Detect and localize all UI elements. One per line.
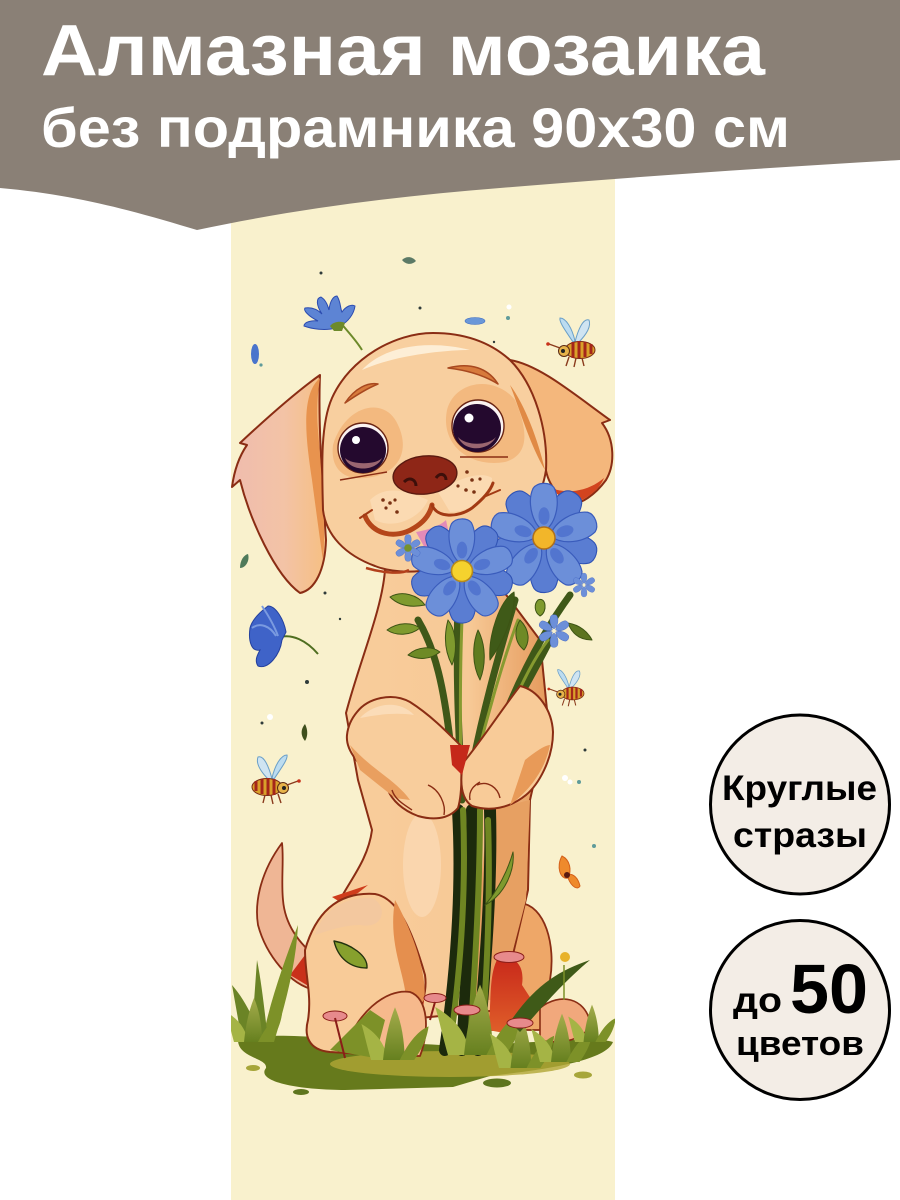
grass clumps [226,925,616,1068]
artwork panel: cream canvas [231,170,615,1200]
long diagonal blade [510,960,590,1032]
right edge clump [568,1005,616,1042]
eyebrows [345,366,498,403]
clump by paw [361,1007,429,1060]
title line 2: без подрамника 90х30 см [41,96,790,159]
flower: small right [572,573,596,597]
bouquet flowers [395,483,600,647]
whisker dots [381,470,482,514]
leaf on leg [334,941,367,968]
badge: round rhinestones [710,715,890,894]
left back blades [232,960,266,1036]
haunch light top [315,898,382,935]
right leg shade [510,745,550,805]
tail [257,843,320,990]
stems [418,595,570,1050]
right haunch [470,903,552,1030]
ground shadow [238,1036,613,1095]
flower: right large [488,483,600,593]
torso orange right shade [470,800,530,1000]
badge text second line: стразы [733,816,867,855]
bee: left [252,755,301,804]
right ear [510,360,612,503]
torso [340,560,548,1020]
right cheek band [510,385,545,470]
left front leg [347,697,461,818]
hind paw front [345,992,426,1056]
mouth [360,483,500,534]
right ear red shadow [550,478,604,503]
chin crease [366,568,409,573]
left leg highlight [360,705,414,718]
red shadow under bouquet [488,957,535,1035]
right hind paw [540,999,590,1042]
bee: middle right [547,670,584,706]
red hip shadow [332,885,424,1040]
red between paws [450,745,470,775]
right front leg [461,686,553,809]
blade by left paw [330,1010,385,1058]
flower: small left [395,535,421,561]
title [41,11,790,159]
left eye [338,423,388,473]
tongue [416,520,452,550]
head highlight [362,345,470,370]
number 50: 50 [790,950,868,1028]
left tall blade [266,925,298,1042]
head [322,333,546,572]
left haunch [305,894,426,1055]
bee: upper right [546,318,595,367]
header banner [0,0,900,230]
yellow wildflower [560,952,570,1000]
badge: up to 50 colours [710,920,890,1100]
flower: lower right bud [538,615,570,647]
bouquet leaves [387,592,592,905]
left clump [226,998,282,1042]
flower: centre large [408,519,516,623]
eye patches [333,384,524,478]
tail red shadow [290,955,315,990]
right clump [531,1014,593,1062]
torso highlight [403,813,441,917]
left ear [232,375,326,593]
left leg shade [350,745,410,800]
dog illustration [232,333,612,1056]
lash lines [340,457,508,480]
up to: до [733,981,782,1020]
badge text: Круглые [722,769,877,808]
red blossoms [323,952,533,1028]
butterfly [559,856,580,888]
title line 1: Алмазная мозаика [41,11,766,91]
loose flower left [249,606,318,667]
floating petals and specks [240,257,596,848]
left ear inner band [306,378,324,560]
muzzle [370,475,492,524]
colours: цветов [736,1025,864,1063]
loose flower top left [304,296,362,350]
blossom stems [335,1002,435,1058]
nose [391,453,459,497]
centre low clump [490,1028,554,1068]
centre tall clump [435,985,525,1055]
haunch shade [393,900,425,1030]
right eye [452,400,504,452]
paw lines [392,782,500,815]
